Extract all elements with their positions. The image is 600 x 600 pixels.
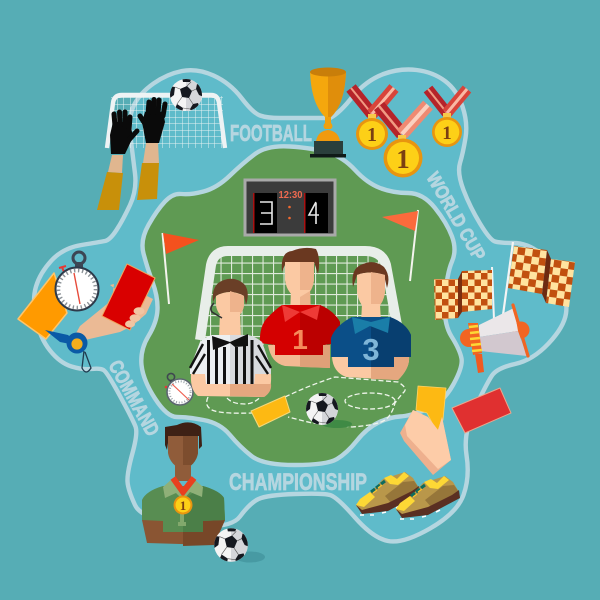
icon: medal 3: 1 bbox=[442, 123, 452, 144]
flag checkered right bbox=[503, 242, 575, 315]
green pitch bbox=[141, 146, 462, 465]
icon: medal 1 bbox=[351, 88, 394, 150]
icon: medal 2 bbox=[379, 105, 428, 178]
icon: medal 1: 1 bbox=[367, 124, 377, 146]
icon: fingers bbox=[125, 307, 144, 328]
referee bbox=[190, 279, 271, 397]
big goal bbox=[200, 251, 397, 345]
icon: whistle bbox=[45, 330, 91, 372]
icon: hand with yellow card bbox=[400, 386, 451, 475]
player number 3 bbox=[331, 262, 411, 380]
hand with red card and stopwatch bbox=[18, 252, 155, 340]
scoreboard: 12:30 bbox=[278, 190, 303, 201]
heading: FOOTBALL: FOOTBALL bbox=[230, 120, 312, 146]
flag checkered left bbox=[434, 267, 494, 320]
corner flag left bbox=[162, 233, 199, 304]
icon: red card right bbox=[452, 388, 511, 433]
heading: WORLD CUP: WORLD CUP bbox=[422, 169, 489, 265]
corner flag right bbox=[382, 210, 418, 281]
pitch markings bbox=[207, 377, 405, 427]
icon: trophy bbox=[310, 68, 346, 158]
icon: goalkeeper right arm bbox=[137, 100, 165, 200]
icon: goalkeeper left arm bbox=[97, 112, 137, 210]
champion man: 1 bbox=[180, 498, 186, 513]
icon: medal 2: 1 bbox=[396, 144, 410, 174]
champion man bbox=[142, 422, 225, 546]
heading: COMMAND: COMMAND bbox=[104, 357, 163, 440]
icon: boot front bbox=[356, 472, 420, 515]
icon: megaphone bbox=[460, 305, 530, 373]
icon: orange card bbox=[18, 273, 67, 339]
icon: red card bbox=[102, 264, 155, 330]
outer blue winding panel bbox=[34, 70, 566, 541]
icon: bottom ball bbox=[212, 526, 250, 564]
player number 3: 3 bbox=[362, 332, 380, 367]
small stopwatch on pitch bbox=[165, 373, 193, 405]
yellow card on pitch bbox=[251, 396, 290, 427]
player number 1: 1 bbox=[292, 324, 308, 355]
icon: medal 3 bbox=[428, 89, 467, 147]
heading: CHAMPIONSHIP: CHAMPIONSHIP bbox=[229, 469, 367, 496]
scoreboard bbox=[245, 180, 335, 235]
icon: referee hand bbox=[75, 284, 153, 340]
icon: stopwatch bbox=[56, 252, 98, 310]
small goal bbox=[107, 95, 225, 148]
player number 1 bbox=[260, 248, 340, 368]
icon: ball at goal bbox=[168, 77, 204, 113]
ball shadow on pitch bbox=[322, 420, 352, 428]
icon: boot rear bbox=[396, 476, 460, 519]
bottom ball shadow bbox=[235, 552, 265, 562]
icon: ball on pitch bbox=[304, 391, 340, 427]
